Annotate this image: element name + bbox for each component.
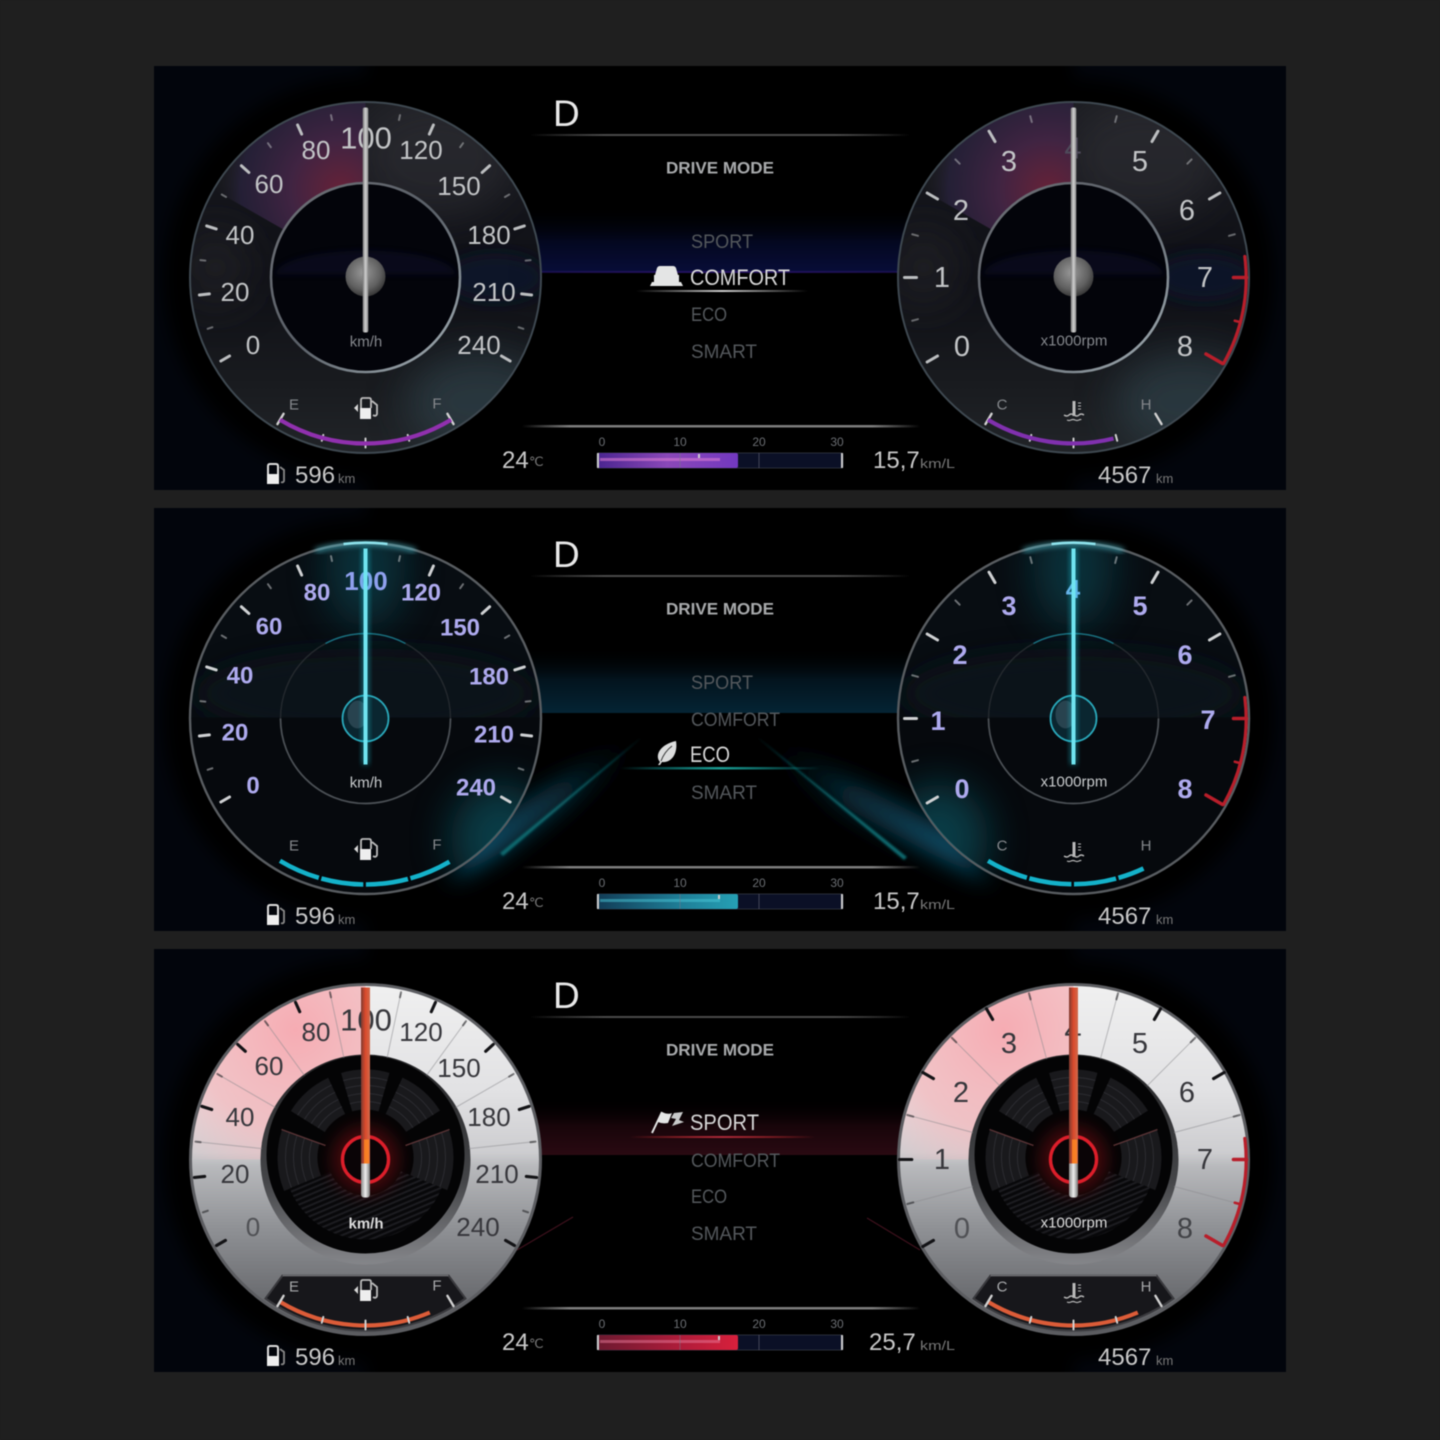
fuel economy bar: 20: [752, 1317, 766, 1331]
speed labels: 150: [437, 1053, 481, 1083]
speed labels: 0: [246, 1212, 260, 1242]
fuel economy bar: 30: [830, 1317, 844, 1331]
rpm labels: 6: [1177, 640, 1193, 670]
mode menu: SPORT: [691, 673, 753, 694]
rpm labels: [934, 130, 1213, 414]
fuel economy bar: 30: [830, 435, 844, 449]
rpm labels: 6: [1179, 1077, 1195, 1109]
speed labels: 240: [456, 1212, 500, 1242]
rpm labels: 8: [1177, 331, 1193, 363]
mode menu: SPORT: [690, 1110, 759, 1135]
speed labels: [221, 1002, 519, 1242]
panel: eco mode cluster: [154, 481, 1286, 951]
range readout: [267, 903, 355, 930]
speed labels: 210: [475, 1159, 519, 1189]
speed labels: 100: [344, 566, 388, 596]
drive mode heading: DRIVE MODE: [666, 600, 774, 618]
speed labels: 100: [340, 1002, 392, 1038]
tachometer: [888, 508, 1250, 896]
speed labels: 100: [340, 120, 392, 156]
range readout: 596: [295, 462, 335, 489]
range readout: 596: [295, 1344, 335, 1371]
tachometer hub and needle: [1050, 548, 1096, 764]
teal horizon glow: [534, 664, 904, 714]
rpm labels: 1: [934, 1144, 950, 1176]
speed labels: 120: [399, 1017, 443, 1047]
temperature arc: [988, 1302, 1138, 1325]
icon: comfort car: [650, 266, 683, 286]
temperature readout: 24: [502, 447, 529, 474]
gauge captions: km/h: [350, 774, 382, 792]
fuel economy bar: [597, 435, 844, 468]
speed labels: E: [289, 396, 299, 414]
speed labels: F: [432, 396, 442, 412]
gauge captions: x1000rpm: [1041, 774, 1107, 790]
speedometer needle: [361, 988, 370, 1198]
temperature readout: ℃: [529, 1336, 544, 1351]
fuel segments: [280, 861, 451, 885]
icon: fuel pump: [354, 839, 377, 860]
average fuel economy readout: [873, 888, 955, 915]
average fuel economy readout: 25,7: [869, 1329, 916, 1356]
rpm labels: C: [997, 396, 1008, 414]
range readout: km: [338, 471, 355, 486]
speed labels: 240: [457, 330, 501, 360]
rpm labels: 7: [1200, 705, 1216, 735]
rpm labels: H: [1141, 396, 1151, 414]
radial segment lines: [196, 993, 535, 1149]
drive mode heading: DRIVE MODE: [666, 158, 774, 178]
temperature readout: [502, 450, 544, 469]
speed labels: [221, 120, 516, 414]
speed labels: 0: [246, 772, 260, 800]
gauge captions: [997, 774, 1151, 854]
mode menu: ECO: [691, 1187, 727, 1208]
speedometer hub and needle: [346, 108, 386, 332]
range readout: [266, 462, 356, 485]
speed labels: 150: [440, 614, 480, 642]
odometer readout: km: [1156, 912, 1173, 927]
average fuel economy readout: 15,7: [873, 447, 920, 474]
speed labels: 60: [255, 1051, 283, 1081]
icon: fuel pump: [354, 398, 377, 419]
range readout: km: [338, 1353, 355, 1368]
fuel economy bar: 20: [752, 876, 766, 890]
speed labels: 120: [399, 135, 443, 165]
speed labels: 20: [221, 1159, 249, 1189]
temperature segments: [988, 861, 1144, 884]
speed labels: 210: [472, 277, 516, 307]
odometer readout: km: [1156, 1353, 1173, 1368]
speedometer hub and needle: [342, 548, 388, 764]
icon: coolant temperature: [1064, 1283, 1084, 1302]
tachometer: [884, 98, 1264, 454]
speed labels: 60: [256, 614, 282, 640]
gauge captions: H: [1141, 838, 1151, 854]
gear indicator: D: [553, 975, 580, 1016]
speedometer: [176, 98, 556, 454]
temperature readout: 24: [502, 888, 529, 915]
odometer readout: [1098, 466, 1174, 484]
speed labels: 180: [467, 220, 511, 250]
red horizon glow: [530, 1097, 910, 1155]
speed labels: 60: [255, 169, 283, 199]
rpm labels: 0: [954, 1213, 970, 1245]
fuel level arc: [280, 420, 451, 444]
fuel economy bar: [597, 1317, 844, 1350]
rpm labels: 3: [1001, 146, 1017, 178]
speed labels: 80: [304, 580, 330, 606]
speed labels: 20: [222, 720, 248, 746]
speed labels: 80: [302, 1017, 330, 1047]
odometer readout: km: [1156, 471, 1173, 486]
mode menu: COMFORT: [690, 265, 790, 290]
temperature readout: ℃: [529, 454, 544, 469]
gauge captions: [289, 774, 442, 854]
gauge captions: F: [432, 1278, 442, 1294]
fuel economy bar: 20: [752, 435, 766, 449]
rpm labels: [934, 1012, 1213, 1245]
speed labels: 40: [227, 662, 253, 690]
temperature readout: ℃: [529, 895, 544, 910]
odometer readout: 4567: [1098, 1344, 1151, 1371]
speed labels: 240: [456, 774, 496, 802]
mode menu: ECO: [691, 305, 727, 326]
speed labels: 150: [437, 171, 481, 201]
average fuel economy readout: km/L: [920, 897, 955, 912]
icon: sport flags: [652, 1112, 684, 1133]
speed labels: 180: [467, 1102, 511, 1132]
rpm labels: 7: [1197, 262, 1213, 294]
gauge captions: H: [1141, 1278, 1151, 1296]
rpm labels: 0: [954, 774, 970, 804]
rpm labels: 6: [1179, 195, 1195, 227]
radial segment lines: [909, 995, 1238, 1203]
temperature readout: 24: [502, 1329, 529, 1356]
rpm labels: 1: [930, 706, 946, 736]
mode menu: COMFORT: [691, 1151, 780, 1172]
rpm labels: 3: [1001, 591, 1017, 621]
red light streaks: [517, 1217, 920, 1250]
drive mode heading: DRIVE MODE: [666, 1040, 774, 1060]
mode menu: SPORT: [691, 232, 753, 253]
rpm labels: 8: [1177, 774, 1193, 804]
fuel economy bar: 10: [673, 876, 687, 890]
rpm labels: 2: [952, 640, 968, 670]
odometer readout: 4567: [1098, 462, 1151, 489]
fuel economy bar: 0: [599, 876, 606, 890]
average fuel economy readout: km/L: [920, 456, 955, 471]
rpm labels: 7: [1197, 1144, 1213, 1176]
temperature readout: [502, 1329, 544, 1356]
gauge captions: x1000rpm: [1041, 1214, 1107, 1232]
speed labels: km/h: [350, 334, 382, 350]
fuel economy bar: 0: [599, 1317, 606, 1331]
speed labels: 180: [469, 664, 509, 690]
rpm labels: 4: [1066, 574, 1081, 604]
icon: coolant temperature: [1064, 401, 1084, 420]
speed labels: [222, 566, 514, 802]
speedometer: [190, 984, 542, 1336]
gauge captions: E: [289, 838, 299, 854]
rpm labels: 4: [1064, 1012, 1082, 1048]
mode menu: SMART: [691, 783, 757, 804]
mode menu: COMFORT: [691, 710, 780, 731]
average fuel economy readout: [869, 1329, 955, 1356]
speed labels: 0: [246, 330, 260, 360]
gauge captions: C: [997, 838, 1008, 854]
rpm labels: 2: [953, 1077, 969, 1109]
mode menu: ECO: [690, 742, 730, 767]
mode menu: SMART: [691, 1224, 757, 1245]
rpm labels: 5: [1132, 591, 1148, 621]
mode menu: [620, 673, 820, 804]
gauge captions: [997, 1214, 1151, 1296]
fuel economy bar: 10: [673, 1317, 687, 1331]
rpm labels: 0: [954, 331, 970, 363]
speedometer: [190, 508, 550, 896]
range readout: [267, 1344, 355, 1371]
gear indicator: D: [553, 534, 580, 575]
range readout: 596: [295, 903, 335, 930]
mode menu: [630, 1110, 815, 1245]
average fuel economy readout: 15,7: [873, 888, 920, 915]
rpm labels: 5: [1132, 1028, 1148, 1060]
tachometer needle: [1069, 988, 1078, 1198]
rpm labels: 1: [934, 262, 950, 294]
rpm labels: x1000rpm: [1041, 332, 1107, 350]
speed labels: 210: [474, 722, 514, 748]
mode menu: SMART: [691, 342, 757, 363]
gauge captions: km/h: [348, 1216, 384, 1232]
teal light fans: [450, 737, 990, 881]
icon: eco leaf: [658, 741, 676, 765]
speed labels: 80: [302, 135, 330, 165]
fuel economy bar: 10: [673, 435, 687, 449]
rpm labels: 4: [1064, 130, 1082, 166]
range readout: km: [338, 912, 355, 927]
average fuel economy readout: [874, 450, 955, 472]
fuel economy bar: 30: [830, 876, 844, 890]
blue horizon glow: [534, 224, 904, 274]
rpm labels: 8: [1177, 1213, 1193, 1245]
speed labels: 40: [226, 1102, 254, 1132]
odometer readout: 4567: [1098, 903, 1151, 930]
temperature readout: [502, 888, 544, 915]
speed labels: 120: [401, 580, 441, 606]
rpm labels: 3: [1001, 1028, 1017, 1060]
tachometer hub and needle: [1054, 108, 1094, 332]
rpm labels: 2: [953, 195, 969, 227]
icon: fuel pump: [354, 1280, 377, 1301]
gauge captions: [289, 1216, 442, 1296]
rpm labels: [930, 574, 1216, 804]
fuel arc: [280, 1302, 430, 1325]
panel: comfort mode cluster: [154, 40, 1286, 510]
rpm labels: 5: [1132, 146, 1148, 178]
speed labels: 20: [221, 277, 249, 307]
fuel economy bar: [597, 876, 844, 909]
average fuel economy readout: km/L: [920, 1338, 955, 1353]
mode menu: [636, 232, 808, 363]
gear indicator: D: [553, 93, 580, 134]
tachometer: [898, 984, 1250, 1336]
gauge captions: E: [289, 1278, 299, 1296]
speed labels: 40: [226, 220, 254, 250]
fuel economy bar: 0: [599, 435, 606, 449]
gauge captions: F: [432, 836, 442, 854]
gauge captions: C: [997, 1278, 1008, 1296]
panel: sport mode cluster: [154, 922, 1286, 1392]
temperature arc: [988, 420, 1114, 443]
icon: coolant temperature: [1064, 842, 1084, 862]
